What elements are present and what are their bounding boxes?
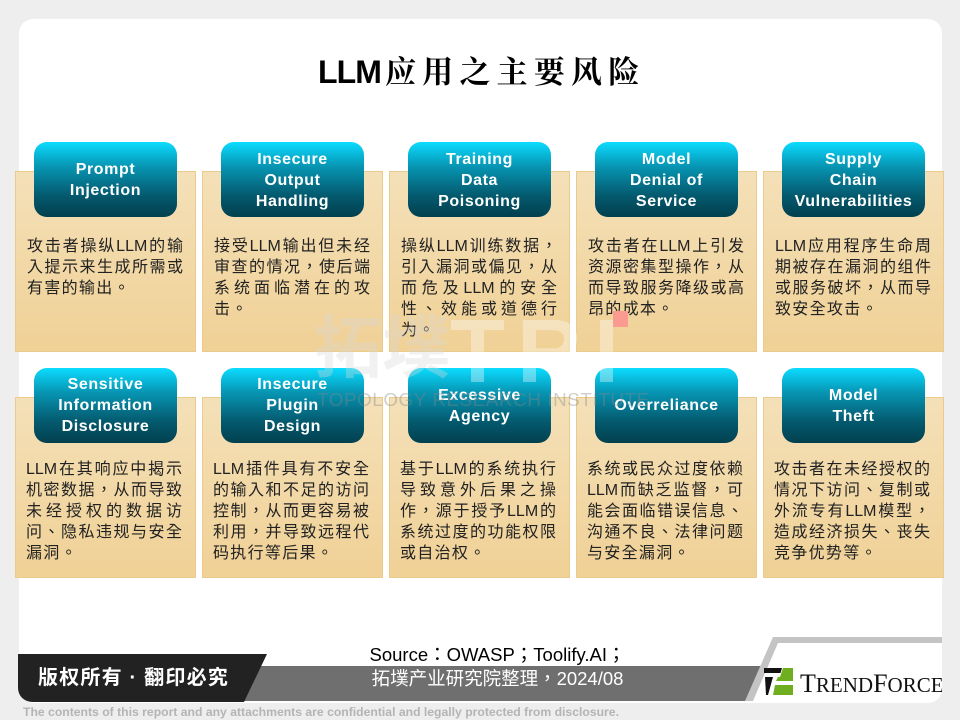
- heading: Model Theft: [782, 368, 925, 443]
- source text: 拓墣产业研究院整理，2024/08: [372, 668, 623, 689]
- text: Insecure Plugin Design: 码执行等后果。: [213, 545, 334, 562]
- watermark: 拓墣: [314, 311, 450, 387]
- panel: Training Data Poisoning: [389, 142, 570, 352]
- heading: Training Data Poisoning: [408, 142, 551, 217]
- heading: Model Theft: Model: [829, 386, 878, 404]
- heading: Excessive Agency: Excessive: [438, 386, 521, 404]
- heading: Excessive Agency: [408, 368, 551, 443]
- text: Insecure Output Handling: [214, 237, 370, 318]
- text: Insecure Output Handling: 审查的情况，使后端: [214, 259, 370, 276]
- heading: Model Theft: Theft: [832, 408, 875, 424]
- text: Sensitive Information Disclosure: [26, 460, 182, 562]
- text: Supply Chain Vulnerabilities: [775, 237, 931, 318]
- panel: Model Theft: [763, 368, 944, 578]
- heading: Supply Chain Vulnerabilities: Supply: [825, 150, 882, 168]
- text: Excessive Agency: 作，源于授予LLM的: [400, 503, 556, 520]
- heading: Supply Chain Vulnerabilities: Vulnerabilities: [795, 192, 912, 210]
- footer grey band: [240, 666, 765, 701]
- text: Sensitive Information Disclosure: 未经授权的数据访: [26, 503, 182, 520]
- text: Model Theft: [774, 460, 930, 562]
- heading: Insecure Output Handling: Insecure: [257, 150, 328, 168]
- text: Excessive Agency: 系统过度的功能权限: [400, 524, 556, 541]
- heading: Overreliance: Overreliance: [614, 397, 719, 414]
- heading: Model Denial of Service: [595, 142, 738, 217]
- heading: Sensitive Information Disclosure: [34, 368, 177, 443]
- heading: Training Data Poisoning: Data: [461, 172, 498, 188]
- title: LLM应用之主要风险: [318, 47, 645, 92]
- text: Excessive Agency: 或自治权。: [400, 545, 487, 562]
- text: Prompt Injection: [27, 237, 183, 297]
- heading: Excessive Agency: Agency: [449, 408, 510, 424]
- text: Overreliance: [587, 460, 743, 562]
- heading: Insecure Plugin Design: Insecure: [257, 376, 328, 393]
- icon: TrendForce mark: [764, 668, 793, 695]
- footer corner stripe: [745, 637, 942, 701]
- text: Training Data Poisoning: 性、效能或道德行: [401, 301, 557, 318]
- text: Insecure Plugin Design: 利用，并导致远程代: [213, 524, 369, 541]
- source text: Source：OWASP；Toolify.AI；: [370, 644, 625, 665]
- text: Sensitive Information Disclosure: 漏洞。: [26, 545, 78, 562]
- panel: Insecure Output Handling: [202, 142, 383, 352]
- text: Overreliance: 沟通不良、法律问题: [587, 524, 743, 541]
- panel: Prompt Injection: [15, 142, 196, 352]
- heading: Supply Chain Vulnerabilities: [782, 142, 925, 217]
- heading: Prompt Injection: Prompt: [76, 161, 135, 178]
- heading: Model Denial of Service: Model: [642, 150, 691, 168]
- text: Model Theft: 造成经济损失、丧失: [774, 524, 930, 541]
- text: Supply Chain Vulnerabilities: 致安全攻击。: [775, 301, 879, 318]
- text: Overreliance: LLM而缺乏监督，可: [587, 482, 743, 499]
- heading: Sensitive Information Disclosure: Information: [58, 397, 153, 414]
- confidentiality notice: The contents of this report and any attachments are confidential and legally protected from disclosure.: [23, 705, 619, 719]
- panel: Overreliance: [576, 368, 757, 578]
- text: Insecure Plugin Design: 的输入和不足的访问: [213, 482, 369, 499]
- text: Excessive Agency: 导致意外后果之操: [400, 482, 556, 499]
- footer copyright badge: [18, 654, 267, 702]
- text: Overreliance: 与安全漏洞。: [587, 545, 691, 562]
- text: Overreliance: 系统或民众过度依赖: [587, 461, 743, 478]
- text: Model Denial of Service: [588, 237, 744, 318]
- heading: Prompt Injection: Injection: [70, 182, 141, 199]
- text: Supply Chain Vulnerabilities: 期被存在漏洞的组件: [775, 259, 931, 276]
- heading: Model Denial of Service: Denial of: [630, 172, 703, 188]
- heading: Prompt Injection: [34, 142, 177, 217]
- panel: Supply Chain Vulnerabilities: [763, 142, 944, 352]
- text: Model Theft: 情况下访问、复制或: [774, 482, 930, 499]
- text: Insecure Plugin Design: 控制，从而更容易被: [213, 503, 369, 520]
- text: Excessive Agency: [400, 460, 556, 562]
- text: Training Data Poisoning: 引入漏洞或偏见，从: [401, 259, 557, 276]
- watermark: TRI: [450, 302, 631, 402]
- heading: Insecure Plugin Design: Design: [264, 418, 321, 435]
- text: Insecure Plugin Design: LLM插件具有不安全: [213, 461, 369, 478]
- text: Model Theft: 竞争优势等。: [774, 545, 878, 562]
- text: Training Data Poisoning: 操纵LLM训练数据，: [401, 238, 557, 255]
- text: Overreliance: 能会面临错误信息、: [587, 503, 743, 520]
- heading: Sensitive Information Disclosure: Disclosure: [62, 418, 149, 435]
- text: Excessive Agency: 基于LLM的系统执行: [400, 461, 556, 478]
- text: Supply Chain Vulnerabilities: LLM应用程序生命周: [775, 238, 931, 255]
- text: Prompt Injection: 有害的输出。: [27, 280, 131, 297]
- text: Sensitive Information Disclosure: 机密数据，从而导致: [26, 482, 182, 499]
- text: Insecure Output Handling: 击。: [214, 301, 249, 318]
- watermark: TOPOLOGY RESEARCH INSTITUTE: [317, 389, 650, 410]
- source text: [370, 644, 625, 689]
- heading: Insecure Output Handling: [221, 142, 364, 217]
- heading: Supply Chain Vulnerabilities: Chain: [830, 172, 877, 188]
- text: Sensitive Information Disclosure: 问、隐私违规与安全: [26, 524, 182, 541]
- text: Insecure Output Handling: 系统面临潜在的攻: [214, 280, 370, 297]
- text: Model Theft: 外流专有LLM模型，: [774, 503, 930, 520]
- footer copyright badge: 版权所有 · 翻印必究: [38, 667, 229, 689]
- text: Prompt Injection: 攻击者操纵LLM的输: [27, 238, 183, 255]
- panel: Insecure Plugin Design: [202, 368, 383, 578]
- heading: Training Data Poisoning: Training: [446, 150, 513, 168]
- text: Model Denial of Service: 而导致服务降级或高: [588, 280, 744, 297]
- text: Model Denial of Service: 资源密集型操作，从: [588, 259, 744, 276]
- text: Training Data Poisoning: 而危及LLM的安全: [401, 280, 557, 297]
- heading: Insecure Plugin Design: [221, 368, 364, 443]
- heading: Training Data Poisoning: Poisoning: [438, 192, 521, 210]
- watermark: [314, 302, 650, 410]
- text: Training Data Poisoning: 为。: [401, 322, 436, 339]
- text: Model Theft: 攻击者在未经授权的: [774, 461, 930, 478]
- panel: Excessive Agency: [389, 368, 570, 578]
- heading: Model Denial of Service: Service: [636, 192, 697, 210]
- text: Training Data Poisoning: [401, 237, 557, 339]
- panel: Sensitive Information Disclosure: [15, 368, 196, 578]
- text: Model Denial of Service: 昂的成本。: [588, 301, 675, 318]
- panel: Model Denial of Service: [576, 142, 757, 352]
- text: Insecure Plugin Design: [213, 460, 369, 562]
- text: Supply Chain Vulnerabilities: 或服务破坏，从而导: [775, 280, 931, 297]
- text: Prompt Injection: 入提示来生成所需或: [27, 259, 183, 276]
- heading: Overreliance: [595, 368, 738, 443]
- text: Insecure Output Handling: 接受LLM输出但未经: [214, 238, 370, 255]
- logo: TrendForce: [764, 668, 942, 697]
- marker: small red square: [613, 311, 628, 327]
- text: Sensitive Information Disclosure: LLM在其响应中揭示: [26, 461, 182, 478]
- heading: Sensitive Information Disclosure: Sensitive: [68, 376, 143, 393]
- heading: Insecure Plugin Design: Plugin: [266, 397, 319, 414]
- heading: Insecure Output Handling: Output: [264, 172, 321, 188]
- text: Model Denial of Service: 攻击者在LLM上引发: [588, 238, 744, 255]
- heading: Insecure Output Handling: Handling: [256, 192, 329, 210]
